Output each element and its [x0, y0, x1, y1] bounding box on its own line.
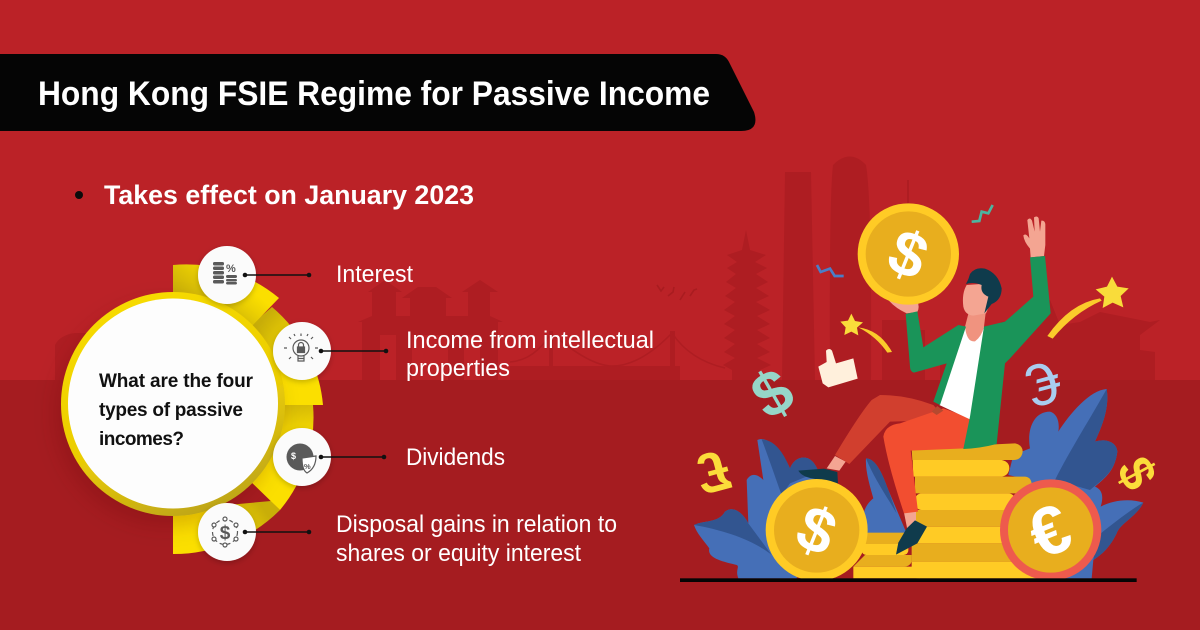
circular diagram: [61, 246, 388, 561]
connector: [245, 531, 309, 533]
icon: euro coin: [1000, 479, 1101, 581]
bullet point: [75, 180, 474, 210]
icon: teal dollar: $: [740, 355, 805, 433]
node: interest: [198, 246, 311, 304]
coin stack: [853, 443, 1037, 578]
outer ring: [61, 292, 285, 516]
icon: blue euro: €: [1019, 347, 1068, 420]
icon: euro coin: €: [1018, 489, 1082, 574]
connector: [321, 350, 387, 352]
icon: big dollar coin: $: [879, 216, 937, 294]
illustration: person with coins: [680, 203, 1168, 582]
icon: left plant: [694, 439, 907, 578]
icon: right plant: [1008, 389, 1143, 578]
title banner: [0, 54, 755, 131]
icon: yellow pound: £: [690, 439, 737, 508]
title: Hong Kong FSIE Regime for Passive Income: [38, 75, 710, 113]
center question: incomes?: [99, 429, 184, 450]
birds: [657, 285, 697, 300]
far leg: [798, 395, 947, 483]
icon: dollar coin lower: [766, 479, 868, 581]
label: disposal gains: shares or equity interest: [336, 540, 581, 567]
icon: coins: %: [226, 263, 236, 275]
skyline silhouette: [55, 156, 1160, 380]
segment 1: [173, 264, 279, 328]
connector: [245, 274, 309, 276]
icon: thumbs up: [818, 349, 858, 387]
icon: big dollar coin: [858, 203, 959, 305]
icon: dollar and percent: $: [291, 451, 296, 461]
icon: dollar coin lower: $: [787, 492, 846, 570]
icon: dollar ring: $: [220, 523, 231, 544]
icon: small star with trail: [840, 314, 892, 353]
holding hand: [884, 294, 919, 313]
icon: dollar and percent: [286, 444, 316, 473]
bullet text: Takes effect on January 2023: [104, 180, 474, 210]
segment 3: [247, 404, 314, 510]
jacket and torso: [906, 256, 1051, 449]
label: interest: Interest: [336, 261, 413, 288]
center circle: [68, 298, 278, 508]
background lower: [0, 380, 1200, 630]
icon: zigzag teal: [972, 205, 993, 222]
node: dividends: [273, 428, 386, 486]
node: disposal gains: [198, 503, 311, 561]
head: [963, 268, 1002, 316]
label: income from intellectual properties: properties: [406, 355, 510, 382]
near leg: [883, 406, 972, 555]
segment 4: [173, 501, 280, 554]
icon: yellow dollar: $: [1106, 448, 1168, 499]
background upper: [0, 0, 1200, 380]
label: dividends: Dividends: [406, 444, 505, 471]
center question: types of passive: [99, 400, 243, 421]
label: income from intellectual properties: Income from intellectual: [406, 327, 654, 354]
connector: [321, 456, 385, 458]
label: disposal gains: Disposal gains in relation to: [336, 511, 617, 538]
icon: big star with trail: [1047, 277, 1129, 339]
node: intellectual property: [273, 322, 388, 380]
segment 2: [245, 307, 323, 405]
center question: What are the four: [99, 371, 254, 392]
hand raised: [1023, 217, 1045, 257]
icon: bulb with lock: [284, 334, 318, 361]
ground line: [680, 578, 1137, 582]
icon: dollar and percent: %: [304, 462, 311, 471]
icon: zigzag blue: [817, 265, 844, 276]
